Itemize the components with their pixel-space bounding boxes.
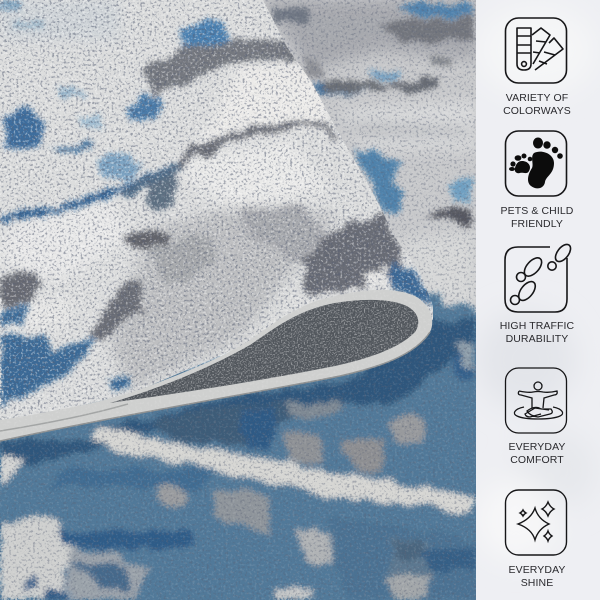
feature: everyday comfort	[504, 367, 568, 466]
floor rug upper	[0, 0, 476, 330]
floor rug lower base	[0, 310, 476, 600]
icon: sparkles	[504, 489, 568, 556]
label: EVERYDAY	[508, 441, 566, 453]
label	[503, 92, 571, 117]
rug top surface	[0, 0, 440, 430]
label: FRIENDLY	[511, 218, 563, 230]
label: DURABILITY	[506, 333, 568, 345]
feature: pets and child friendly	[501, 130, 573, 230]
rug photograph	[0, 0, 476, 600]
label	[500, 320, 574, 345]
label: COMFORT	[510, 454, 564, 466]
label: VARIETY OF	[506, 92, 568, 104]
feature: high traffic durability	[500, 244, 574, 345]
icon: paw and baby foot	[504, 130, 568, 197]
rug binding edge	[0, 290, 432, 441]
sidebar mottling	[487, 321, 565, 538]
icon: footprints	[504, 244, 572, 313]
label: HIGH TRAFFIC	[500, 320, 574, 332]
label: EVERYDAY	[508, 564, 566, 576]
floor pile texture	[0, 0, 476, 600]
label: PETS & CHILD	[501, 205, 573, 217]
icon: colour swatch fan	[504, 17, 568, 84]
label	[501, 205, 573, 230]
label: COLORWAYS	[503, 105, 571, 117]
mid-tone pile speckle	[0, 0, 476, 600]
sidebar panel	[476, 0, 600, 600]
label	[508, 441, 566, 466]
rug underside	[110, 300, 418, 403]
label: SHINE	[521, 577, 553, 589]
label	[508, 564, 566, 589]
feature: variety of colorways	[503, 17, 571, 117]
feature: everyday shine	[504, 489, 568, 589]
icon: meditating person	[504, 367, 568, 434]
floor rug lower pattern	[0, 296, 476, 600]
